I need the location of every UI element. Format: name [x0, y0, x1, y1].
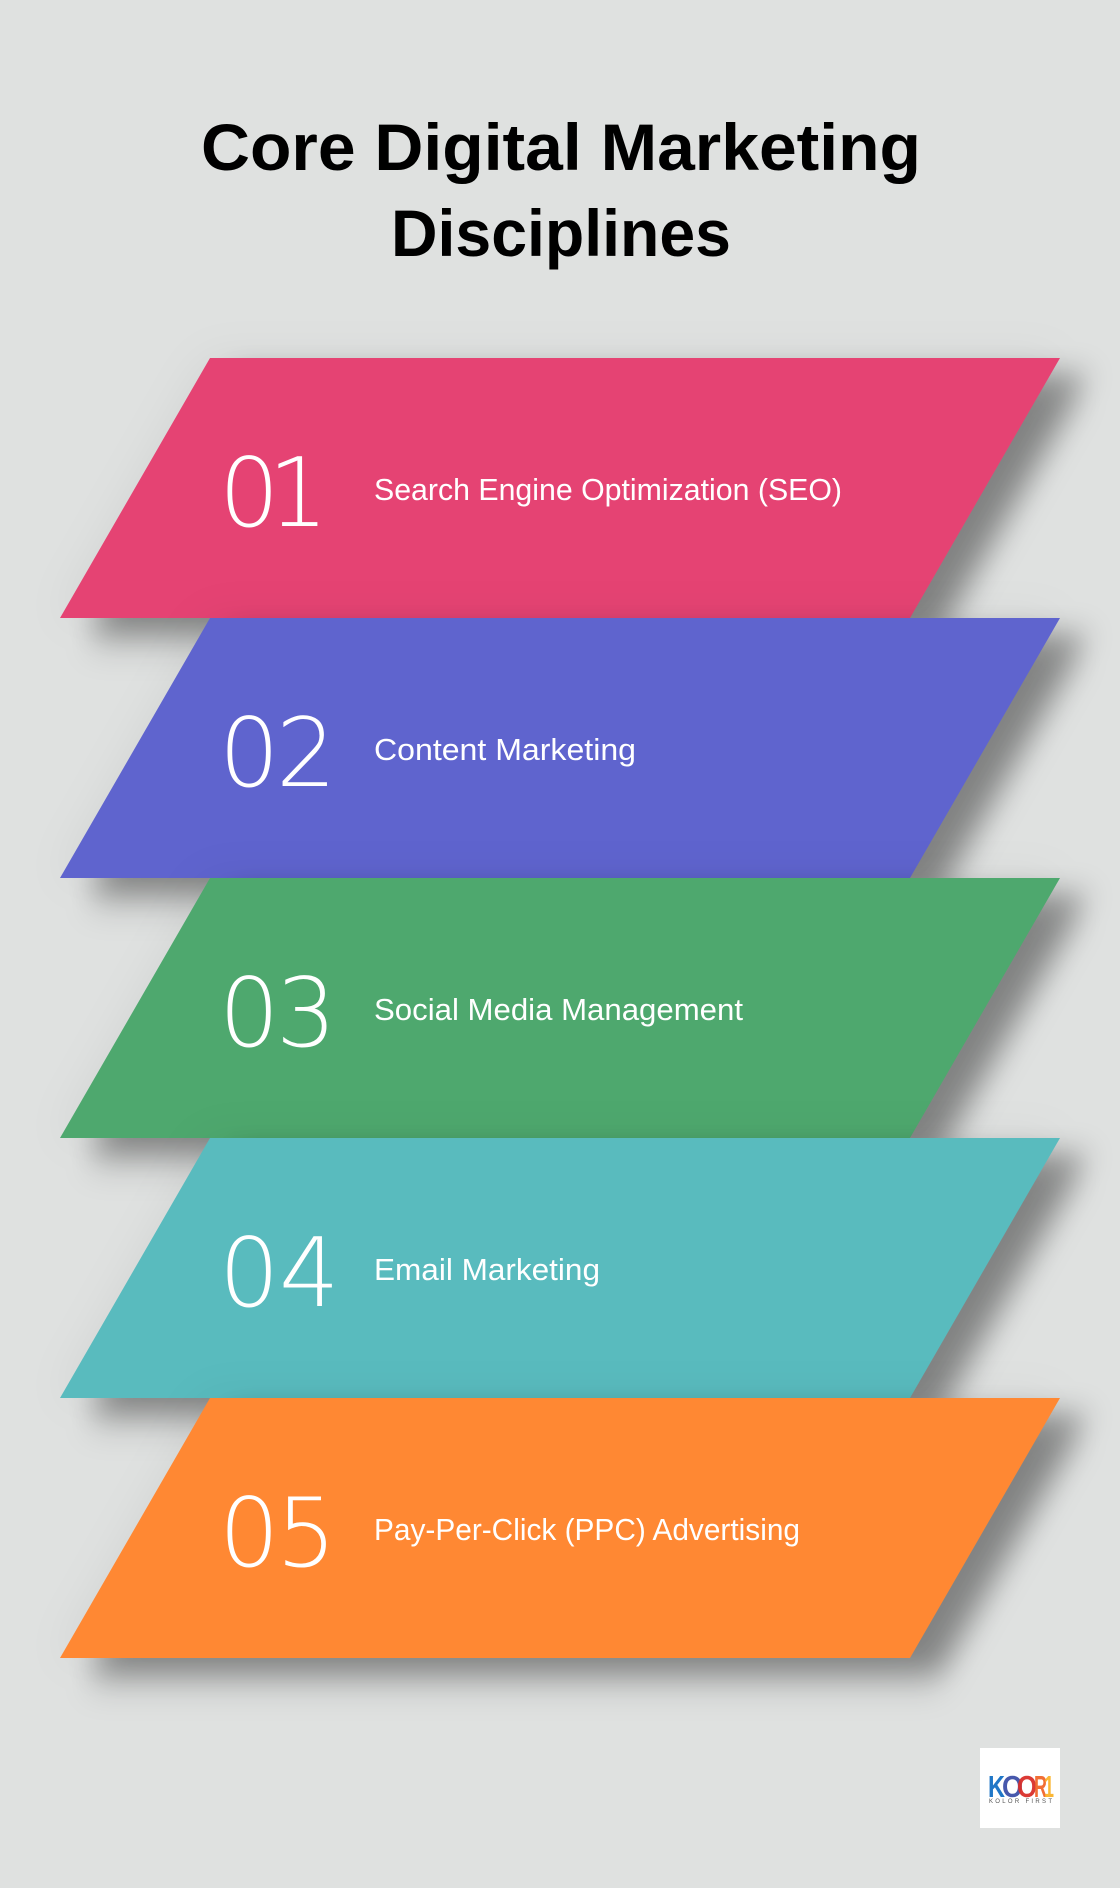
panel: 05 Pay-Per-Click Advertising [60, 1398, 1060, 1658]
panel: 04 Email Marketing: 04 [219, 1219, 339, 1329]
panel: 03 Social Media Management: Social Media Management [374, 992, 743, 1027]
panel: 01 Search Engine Optimization: 01 [219, 439, 328, 549]
title: Core Digital Marketing [201, 110, 921, 184]
title [201, 110, 921, 270]
panel: 04 Email Marketing [60, 1138, 1060, 1398]
panel: 03 Social Media Management [60, 878, 1060, 1138]
logo: KOOR1 [980, 1748, 1060, 1828]
logo: KOOR1: R [1034, 1769, 1047, 1804]
logo: KOOR1: K [988, 1769, 1005, 1804]
logo: KOOR1: O [1017, 1769, 1037, 1804]
panel: 02 Content Marketing: Content Marketing [374, 732, 636, 767]
logo: KOOR1: 1 [1044, 1769, 1054, 1804]
logo: KOOR1: O [1002, 1769, 1023, 1804]
panel: 04 Email Marketing: Email Marketing [374, 1252, 600, 1287]
panel: 02 Content Marketing: 02 [219, 699, 336, 809]
panel: 01 Search Engine Optimization: Search Engine Optimization (SEO) [374, 472, 842, 507]
panel: 02 Content Marketing [60, 618, 1060, 878]
panel: 05 Pay-Per-Click Advertising: 05 [219, 1479, 336, 1589]
title: Disciplines [391, 196, 731, 270]
logo: KOOR1: KOLOR FIRST [989, 1799, 1052, 1805]
panel: 03 Social Media Management: 03 [219, 959, 336, 1069]
panel: 01 Search Engine Optimization [60, 358, 1060, 618]
panel: 05 Pay-Per-Click Advertising: Pay-Per-Click (PPC) Advertising [374, 1512, 800, 1547]
